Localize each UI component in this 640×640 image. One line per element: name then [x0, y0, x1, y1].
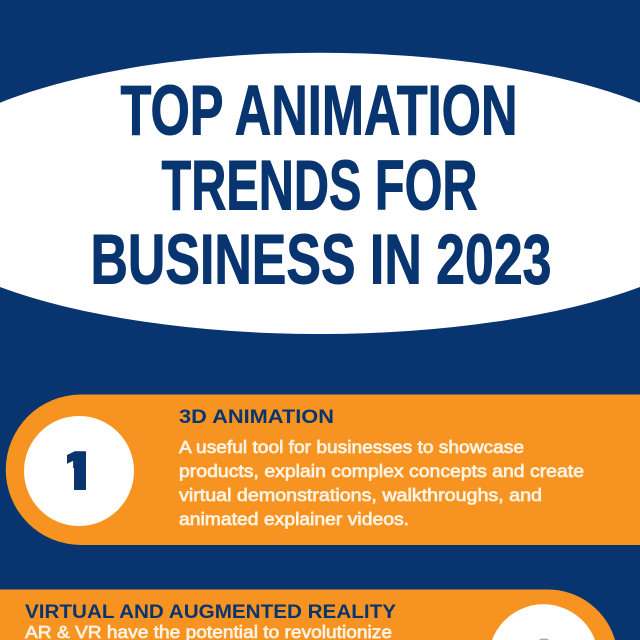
heading: 3D animation: 3D ANIMATION: [179, 406, 334, 428]
number badge 1: 1: [58, 442, 98, 501]
body text: 3D animation: A useful tool for businesses to showcase: [179, 437, 524, 457]
body text: 3D animation: [179, 437, 584, 529]
body text: 3D animation: virtual demonstrations, walkthroughs, and: [179, 485, 542, 505]
panel: virtual and augmented reality: [0, 590, 615, 640]
number badge 2: [492, 604, 595, 640]
title: [90, 70, 552, 298]
panel: 3D animation: [6, 394, 640, 545]
header: white ellipse with title: [0, 53, 640, 334]
number badge 1: [24, 416, 134, 526]
body text: 3D animation: products, explain complex concepts and create: [179, 461, 584, 481]
title: TRENDS FOR: [162, 146, 478, 224]
heading: virtual and augmented reality: VIRTUAL AND AUGMENTED REALITY: [25, 601, 396, 623]
body text: 3D animation: animated explainer videos.: [179, 509, 409, 529]
